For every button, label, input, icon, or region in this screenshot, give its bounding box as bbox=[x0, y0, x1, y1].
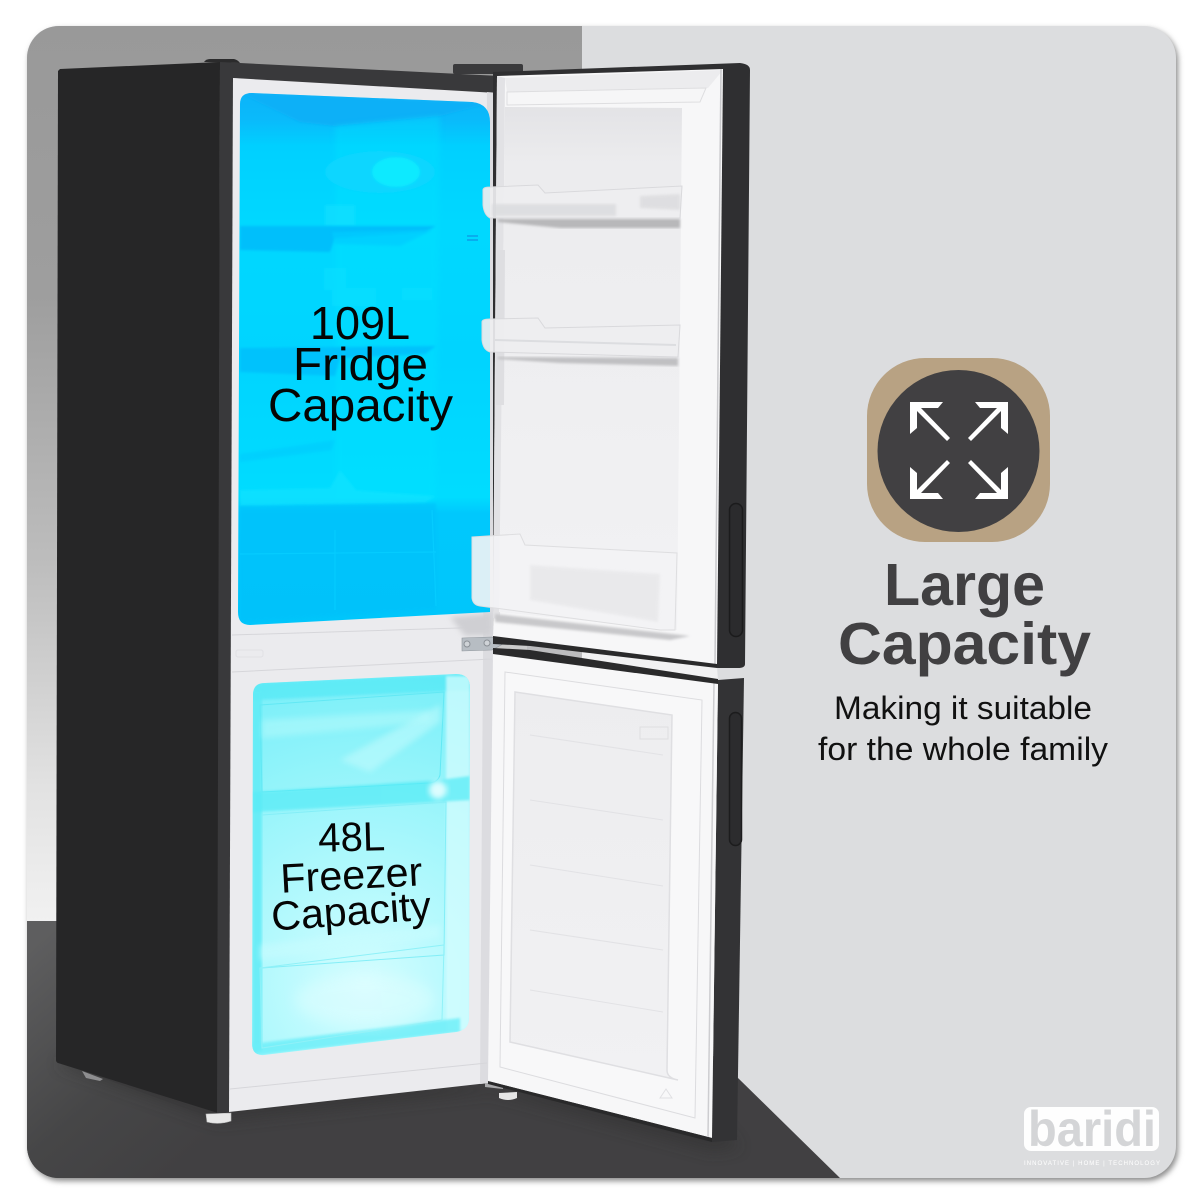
freezer compartment bbox=[252, 674, 470, 1056]
streak one bbox=[340, 705, 440, 772]
door white face bbox=[488, 653, 718, 1138]
gasket gap bbox=[527, 644, 718, 680]
logo word: baridi bbox=[1028, 1101, 1156, 1157]
back foot bbox=[82, 1071, 103, 1081]
cabinet front white bbox=[229, 78, 497, 1112]
recycle mark bbox=[660, 1089, 672, 1098]
freezer capacity word: Capacity bbox=[270, 882, 433, 940]
crisper lines bbox=[240, 510, 436, 610]
frame right strip bbox=[480, 92, 498, 1084]
logo tagline: INNOVATIVE | HOME | TECHNOLOGY bbox=[1024, 1161, 1160, 1167]
left saturated edge bbox=[252, 690, 262, 1054]
shelf one bbox=[240, 226, 436, 252]
door foot pad bbox=[499, 1092, 517, 1100]
icon circle bbox=[878, 370, 1040, 532]
top band bbox=[253, 674, 470, 700]
top door hinge bbox=[453, 64, 523, 74]
background: floor highlight bbox=[27, 921, 90, 1178]
bottom saturated edge bbox=[252, 1018, 460, 1056]
glare lower bbox=[295, 974, 435, 1026]
label: freezer capacity bbox=[270, 813, 433, 940]
fridge bbox=[56, 59, 750, 1142]
door gasket line bbox=[708, 683, 714, 1137]
freezer value: 48L bbox=[318, 813, 386, 861]
door foot bar bbox=[485, 1083, 503, 1089]
streak three bbox=[260, 925, 440, 960]
description bbox=[818, 690, 1108, 767]
shelf one bbox=[483, 185, 682, 218]
description line two: for the whole family bbox=[818, 731, 1108, 767]
shelf three bbox=[241, 472, 432, 505]
fridge word: Fridge bbox=[293, 338, 428, 390]
gasket upper line bbox=[493, 636, 717, 668]
shelf one shadow bbox=[498, 219, 680, 228]
upper door bbox=[472, 63, 750, 668]
fridge cavity fill bbox=[238, 93, 490, 625]
upper handle recess bbox=[730, 504, 742, 636]
rear column highlight bbox=[337, 117, 439, 142]
frame grooves bbox=[230, 627, 492, 1089]
door recess bbox=[510, 692, 678, 1080]
upper drawer bbox=[260, 692, 444, 792]
description line one: Making it suitable bbox=[834, 690, 1092, 726]
door recess bbox=[499, 107, 682, 630]
fridge capacity word: Capacity bbox=[268, 379, 453, 431]
door gasket bbox=[493, 636, 718, 684]
shelf two shadow bbox=[498, 357, 678, 366]
freezer cavity detail bbox=[252, 674, 470, 1056]
side vent bbox=[467, 236, 478, 240]
background: floor bbox=[27, 1056, 840, 1178]
hinge screws bbox=[464, 640, 490, 647]
freezer word: Freezer bbox=[279, 848, 423, 902]
door hinge side shade bbox=[493, 76, 505, 620]
door ledge bbox=[507, 88, 706, 105]
background: left wall bbox=[27, 26, 582, 922]
lower drawer bbox=[262, 802, 446, 968]
door frame bbox=[500, 672, 702, 1118]
bin shadow bbox=[495, 614, 690, 640]
freezer cavity fill bbox=[252, 674, 470, 1055]
heading line two: Capacity bbox=[838, 611, 1091, 677]
crisper body bbox=[240, 503, 436, 622]
diagonal glass edge bbox=[241, 442, 332, 460]
light unit bbox=[325, 151, 435, 193]
gasket lower line bbox=[493, 648, 718, 684]
streak two bbox=[262, 710, 430, 738]
front foot bbox=[206, 1113, 231, 1123]
floor shadow bbox=[76, 1069, 722, 1145]
top rear hinge bbox=[204, 59, 240, 63]
upper drawer band bbox=[253, 776, 470, 812]
upper clips bbox=[326, 206, 354, 225]
shelf two bbox=[482, 318, 680, 357]
door gasket line bbox=[715, 69, 721, 664]
lower handle recess bbox=[730, 712, 742, 846]
door ribs bbox=[530, 735, 663, 1012]
icon arrows bbox=[910, 402, 1008, 499]
door bin bbox=[472, 534, 677, 630]
shelf two body bbox=[482, 318, 680, 357]
door dark edge bbox=[712, 678, 744, 1142]
door inner side shade bbox=[496, 250, 505, 405]
door dark edge bbox=[493, 63, 750, 668]
shelf one lower shade bbox=[334, 232, 421, 245]
door label bbox=[640, 727, 668, 739]
light unit glow bbox=[372, 157, 420, 187]
fridge cavity detail bbox=[240, 93, 490, 622]
fridge value: 109L bbox=[310, 297, 410, 349]
right bright strip bbox=[446, 676, 470, 1032]
door top band bbox=[505, 70, 723, 92]
bin fold bbox=[530, 565, 660, 622]
shelf two bbox=[240, 346, 436, 376]
shelf two rim bbox=[495, 340, 676, 345]
frame label bbox=[236, 650, 263, 657]
logo plate bbox=[1024, 1107, 1159, 1151]
heading bbox=[838, 552, 1091, 677]
cabinet side bbox=[56, 62, 220, 1113]
door bottom edge bbox=[488, 1081, 712, 1142]
shelf one body bbox=[483, 185, 682, 218]
mid hinge bbox=[462, 637, 503, 651]
door white face bbox=[493, 69, 723, 665]
bright spot bbox=[429, 781, 447, 799]
lower door bbox=[488, 653, 744, 1142]
icon: expand arrows badge bbox=[867, 358, 1050, 542]
fridge compartment bbox=[238, 93, 490, 625]
icon background bbox=[867, 358, 1050, 542]
heading line one: Large bbox=[884, 552, 1045, 618]
bin body bbox=[472, 534, 677, 630]
shelf one rim bbox=[492, 204, 616, 216]
logo: baridi bbox=[1024, 1101, 1160, 1167]
label: fridge capacity bbox=[268, 297, 453, 431]
gasket grey section bbox=[527, 644, 582, 659]
hinge plate bbox=[462, 637, 503, 651]
bottom drawer bbox=[260, 945, 444, 1048]
cabinet front frame bbox=[217, 62, 500, 1113]
top wall bbox=[240, 93, 490, 126]
hinge wall shadow bbox=[450, 613, 492, 636]
door foot bbox=[485, 1083, 517, 1100]
shelf clips bbox=[324, 268, 432, 306]
shelf one right rim bbox=[640, 194, 680, 210]
